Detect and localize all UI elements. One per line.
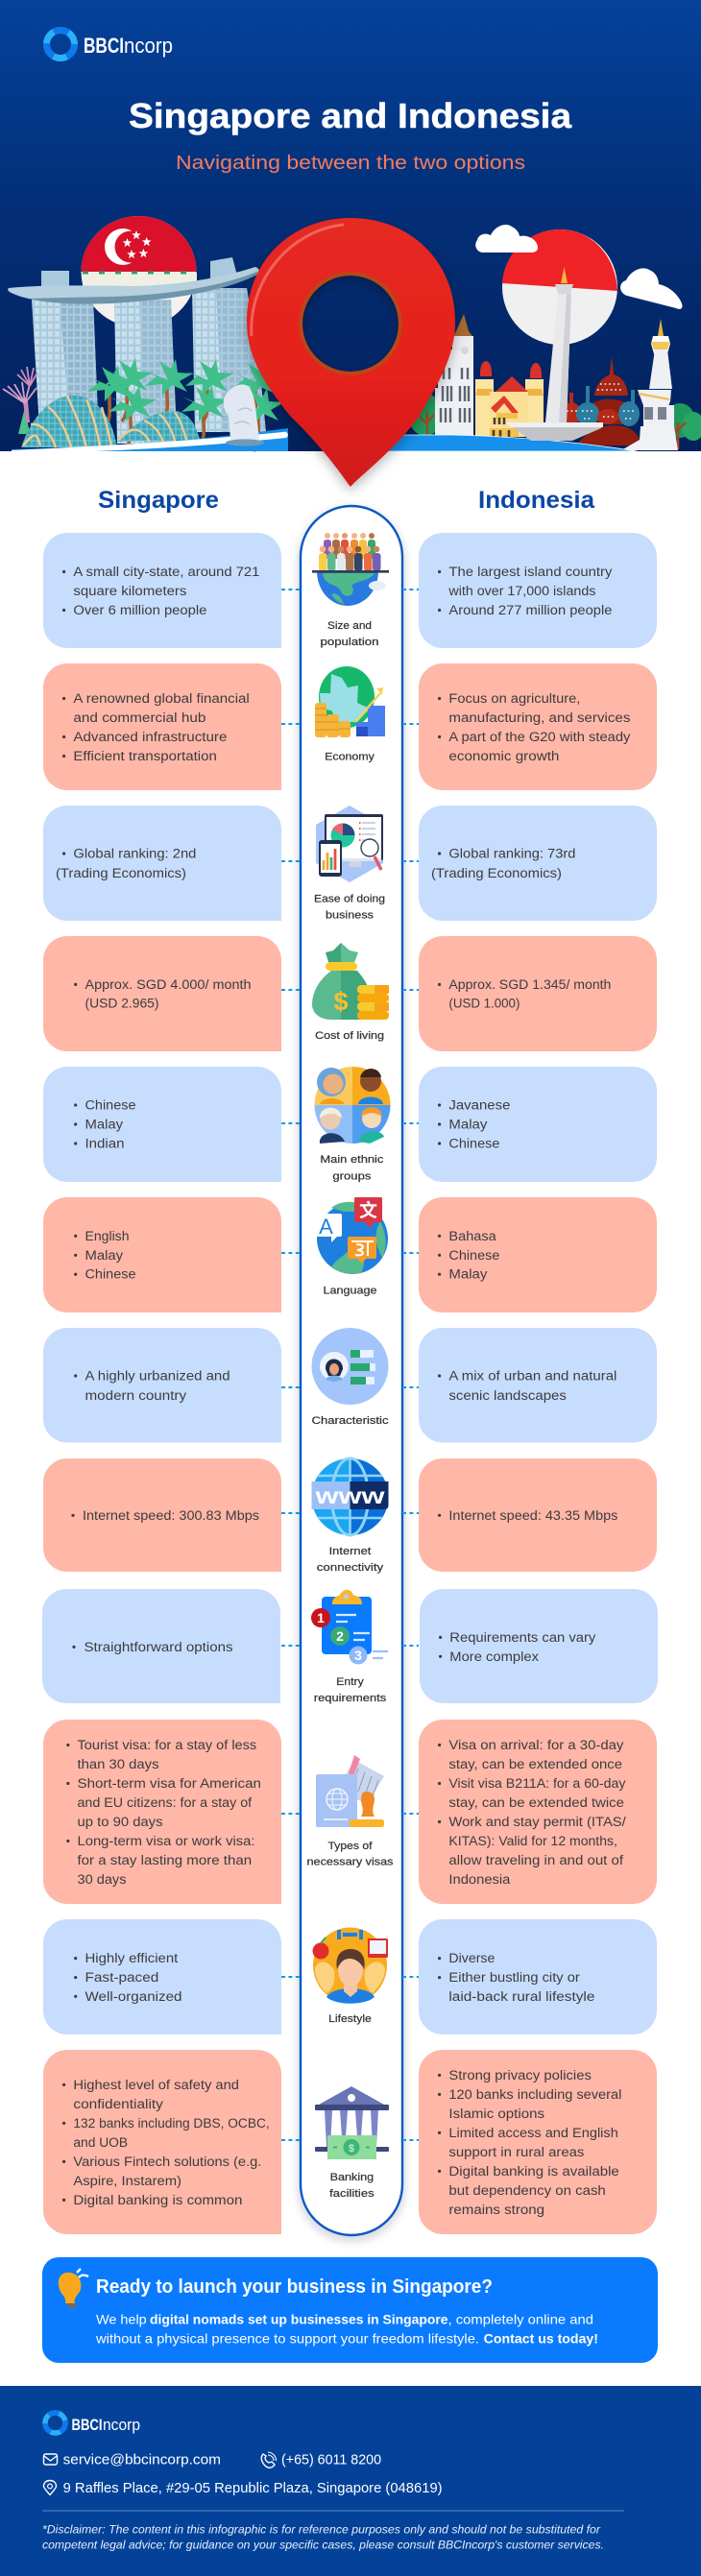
panel: Indonesia economy: manufacturing, and services [448, 710, 631, 725]
panel: Singapore banking facilities: 132 banks including DBS, OCBC, [73, 2116, 270, 2131]
label: entry requirements: requirements [314, 1693, 387, 1704]
label: size and population: population [321, 637, 378, 648]
gardens domes [21, 396, 200, 447]
panel: Singapore language [43, 1197, 281, 1312]
label: entry requirements: Entry [336, 1676, 364, 1688]
panel: Singapore lifestyle [43, 1919, 281, 2034]
panel: Singapore characteristic: modern country [85, 1388, 186, 1403]
sea stripe [12, 432, 288, 451]
label: characteristic: Characteristic [311, 1415, 389, 1427]
panel: Indonesia types of visas: Indonesia [448, 1872, 511, 1887]
illustration: Singapore skyline [3, 216, 288, 451]
trees [408, 394, 701, 449]
panel: Singapore ease of doing business [43, 806, 281, 921]
panel: Singapore cost of living [43, 936, 281, 1051]
label: types of necessary visas: necessary visas [307, 1857, 394, 1868]
palm trees [87, 358, 284, 451]
icon: main ethnic groups [315, 1067, 390, 1144]
panel: Indonesia banking facilities: 120 banks including several [448, 2087, 621, 2102]
label: banking facilities: facilities [329, 2188, 375, 2200]
panel: Indonesia language: Bahasa [448, 1229, 496, 1243]
contact: email: service@bbcincorp.com [63, 2452, 221, 2468]
panel: Indonesia characteristic: scenic landscapes [448, 1388, 567, 1403]
label: lifestyle: Lifestyle [328, 2013, 372, 2025]
connector lines [281, 590, 419, 2140]
icon: banking facilities [315, 2086, 389, 2159]
icon: light bulb [59, 2269, 88, 2308]
icon: size and population [312, 533, 389, 606]
panel: Singapore lifestyle: Fast-paced [85, 1970, 158, 1985]
label: banking facilities: Banking [330, 2172, 374, 2183]
panel: Indonesia ethnic groups: Chinese [448, 1137, 499, 1150]
heading: Indonesia: Indonesia [478, 487, 595, 514]
panel: Indonesia language: Chinese [448, 1248, 499, 1263]
callout text: without a physical presence to support your freedom lifestyle. [95, 2331, 479, 2347]
label: main ethnic groups: groups [332, 1171, 372, 1183]
Marina Bay Sands towers [32, 288, 266, 444]
icon: lifestyle [313, 1928, 388, 2004]
panel: Singapore types of visas: Short-term visa for American [77, 1776, 261, 1791]
label: main ethnic groups [320, 1154, 384, 1183]
panel: Singapore lifestyle: Highly efficient [85, 1951, 179, 1965]
National Monument [506, 267, 603, 441]
panel: Singapore economy: Advanced infrastructure [73, 730, 227, 744]
merlion statue [224, 385, 264, 446]
panel: Indonesia types of visas [419, 1720, 657, 1904]
panel: Singapore size and population: A small city-state, around 721 [73, 565, 259, 579]
panel: Indonesia economy [419, 663, 657, 790]
stupas [562, 357, 641, 445]
icon: cost of living [312, 943, 389, 1020]
panel: Indonesia entry requirements: Requirements can vary [449, 1630, 596, 1645]
panel: Singapore size and population [43, 533, 281, 648]
panel: Indonesia types of visas: allow traveling in and out of [448, 1853, 623, 1867]
panel: Indonesia lifestyle [419, 1919, 657, 2034]
contact: address: 9 Raffles Place, #29-05 Republic Plaza, Singapore (048619) [63, 2481, 443, 2496]
panel: Singapore ethnic groups: Indian [85, 1137, 125, 1150]
icon: language: A [319, 1215, 333, 1239]
panel: Singapore size and population: Over 6 million people [73, 603, 206, 617]
label: language: Language [323, 1285, 376, 1296]
panel: Singapore ease of doing business: (Trading Economics) [56, 866, 186, 880]
logo: BBCIncorp header [46, 31, 173, 58]
panel: Singapore internet connectivity [43, 1458, 281, 1572]
panel: Indonesia entry requirements: More complex [449, 1649, 539, 1664]
disclaimer: competent legal advice; for guidance on your specific cases, please consult BBCIncorp's customer services. [42, 2539, 604, 2552]
icon: ease of doing business [316, 806, 383, 882]
panel: Indonesia ease of doing business: (Trading Economics) [431, 866, 562, 880]
callout text: , completely online and [447, 2312, 593, 2327]
panel: Indonesia types of visas: Work and stay permit (ITAS/ [448, 1815, 626, 1829]
panel: Indonesia banking facilities: remains strong [448, 2203, 544, 2217]
callout text: Contact us today! [484, 2331, 598, 2347]
panel: Singapore types of visas: and EU citizens: for a stay of [77, 1795, 252, 1810]
panel: Singapore ethnic groups [43, 1067, 281, 1182]
panel: Singapore banking facilities: Aspire, Instarem) [73, 2174, 181, 2188]
panel: Singapore cost of living: (USD 2.965) [85, 997, 159, 1010]
panel: Indonesia types of visas: KITAS): Valid for 12 months, [448, 1834, 617, 1848]
label: economy: Economy [325, 751, 375, 762]
panel: Singapore entry requirements [42, 1589, 280, 1703]
panel: Indonesia size and population: The largest island country [448, 565, 613, 579]
panel: Indonesia economy: A part of the G20 with steady [448, 730, 631, 744]
panel: Singapore size and population: square kilometers [73, 584, 187, 598]
panel: Indonesia types of visas: stay, can be extended once [448, 1757, 622, 1771]
panel: Indonesia banking facilities: support in rural areas [448, 2145, 585, 2159]
panel: Indonesia entry requirements [420, 1589, 658, 1703]
label: ease of doing business: business [326, 910, 375, 922]
label: internet connectivity: connectivity [317, 1562, 384, 1574]
callout text: We help [96, 2312, 147, 2327]
red and yellow church [475, 361, 544, 437]
label: ease of doing business: Ease of doing [314, 893, 385, 904]
panel: Singapore economy: Efficient transportation [73, 749, 217, 763]
icon: entry requirements: 1 [317, 1610, 325, 1625]
panel: Singapore characteristic: A highly urbanized and [85, 1369, 230, 1383]
panel: Singapore language: Chinese [85, 1267, 136, 1282]
label: banking facilities [329, 2172, 375, 2200]
icon: banking facilities: $ [349, 2143, 354, 2155]
icon: internet connectivity: www [314, 1483, 385, 1508]
callout heading: Ready to launch your business in Singapore? [96, 2276, 493, 2298]
callout text: digital nomads set up businesses in Singapore [150, 2312, 448, 2327]
panel: Indonesia lifestyle: laid-back rural lifestyle [448, 1989, 594, 2004]
panel: Indonesia language [419, 1197, 657, 1312]
panel: Indonesia size and population: Around 277 million people [448, 603, 612, 617]
panel: Singapore ethnic groups: Chinese [85, 1098, 136, 1112]
label: cost of living: Cost of living [315, 1030, 384, 1042]
panel: Indonesia characteristic: A mix of urban and natural [448, 1369, 616, 1383]
panel: Singapore banking facilities: confidentiality [73, 2097, 163, 2111]
subtitle: Navigating between the two options [176, 153, 525, 174]
icon: language: 文 [359, 1196, 377, 1222]
icon: entry requirements: 2 [336, 1628, 344, 1644]
panel: Indonesia internet connectivity [419, 1458, 657, 1572]
panel: Indonesia banking facilities [419, 2050, 657, 2234]
panel: Indonesia types of visas: stay, can be extended twice [448, 1795, 624, 1810]
icon: language [311, 1196, 388, 1274]
panel: Singapore banking facilities [43, 2050, 281, 2234]
panel: Indonesia ethnic groups: Malay [448, 1118, 488, 1131]
logo: BBCIncorp footer [45, 2413, 140, 2434]
panel: Singapore types of visas: than 30 days [77, 1757, 159, 1771]
panel: Singapore types of visas: 30 days [77, 1872, 127, 1887]
panel: Singapore banking facilities: Highest level of safety and [73, 2078, 239, 2092]
callout: call to action [42, 2257, 658, 2363]
panel: Indonesia ethnic groups [419, 1067, 657, 1182]
logo: BBCIncorp header: ncorp [124, 34, 173, 58]
icon: entry requirements: 3 [354, 1648, 362, 1663]
panel: Indonesia banking facilities: but dependency on cash [448, 2183, 606, 2198]
panel: Indonesia ease of doing business [419, 806, 657, 921]
central category column [301, 506, 402, 2235]
label: entry requirements [314, 1676, 387, 1704]
SkyPark deck [8, 257, 259, 303]
panel: Indonesia internet connectivity: Internet speed: 43.35 Mbps [448, 1508, 618, 1523]
panel: Singapore banking facilities: Digital banking is common [73, 2193, 242, 2207]
callout text [95, 2312, 598, 2347]
panel: Indonesia cost of living: Approx. SGD 1.345/ month [448, 977, 611, 992]
disclaimer: *Disclaimer: The content in this infographic is for reference purposes only and should not be substituted for [42, 2523, 601, 2537]
panel: Singapore economy [43, 663, 281, 790]
supertrees [3, 367, 37, 434]
icon: internet connectivity [311, 1458, 388, 1535]
panel: Indonesia economy: Focus on agriculture, [448, 691, 580, 706]
icon: Indonesia flag [502, 229, 617, 345]
panel: Indonesia characteristic [419, 1328, 657, 1442]
sea right [384, 435, 637, 451]
label: internet connectivity: Internet [329, 1546, 371, 1557]
label: types of necessary visas: Types of [328, 1841, 374, 1852]
panel: Singapore banking facilities: Various Fintech solutions (e.g. [73, 2155, 261, 2169]
panel: Singapore language: English [85, 1229, 129, 1243]
clouds [475, 225, 683, 309]
heading: Singapore: Singapore [98, 487, 219, 514]
panel: Indonesia size and population [419, 533, 657, 648]
panel: Indonesia ethnic groups: Javanese [448, 1098, 510, 1112]
label: ease of doing business [314, 893, 385, 922]
panel: Singapore economy: A renowned global financial [73, 691, 250, 706]
logo: BBCIncorp header: BBCI [84, 34, 124, 58]
Tugu monument [621, 319, 678, 450]
panel: Indonesia cost of living: (USD 1.000) [448, 997, 520, 1010]
clock tower [435, 314, 473, 436]
disclaimer [42, 2523, 604, 2552]
icon: types of necessary visas [316, 1755, 384, 1827]
panel: Singapore types of visas [43, 1720, 281, 1904]
panel: Singapore internet connectivity: Internet speed: 300.83 Mbps [83, 1508, 259, 1523]
title: Singapore and Indonesia [129, 96, 572, 135]
panel: Singapore types of visas: up to 90 days [77, 1815, 163, 1829]
icon: Singapore flag [81, 216, 196, 327]
illustration: Indonesia skyline [384, 225, 701, 451]
panel: Singapore ethnic groups: Malay [85, 1118, 123, 1131]
panel: Indonesia banking facilities: Islamic options [448, 2107, 544, 2121]
panel: Indonesia lifestyle: Either bustling city or [448, 1970, 580, 1985]
panel: Singapore ease of doing business: Global ranking: 2nd [73, 847, 196, 860]
panel: Singapore banking facilities: and UOB [73, 2135, 128, 2150]
panel: Indonesia banking facilities: Digital banking is available [448, 2164, 619, 2179]
panel: Indonesia banking facilities: Strong privacy policies [448, 2068, 592, 2082]
panel: Indonesia banking facilities: Limited access and English [448, 2126, 618, 2140]
icon: entry requirements [311, 1590, 388, 1665]
footer background [0, 2386, 701, 2576]
panel: Singapore types of visas: Tourist visa: for a stay of less [77, 1738, 257, 1752]
label: main ethnic groups: Main ethnic [320, 1154, 384, 1166]
sea left [12, 428, 288, 451]
panel: Singapore lifestyle: Well-organized [85, 1989, 182, 2004]
icon: characteristic [311, 1328, 388, 1405]
panel: Indonesia types of visas: Visit visa B211A: for a 60-day [448, 1776, 626, 1791]
logo: BBCIncorp footer: ncorp [103, 2416, 140, 2434]
panel: Indonesia ease of doing business: Global ranking: 73rd [448, 847, 575, 860]
panel: Singapore characteristic [43, 1328, 281, 1442]
icon: cost of living: $ [333, 987, 349, 1016]
icon: location pin [247, 218, 455, 487]
panel: Singapore entry requirements: Straightforward options [85, 1640, 233, 1654]
label: types of necessary visas [307, 1841, 394, 1868]
panel: Singapore cost of living: Approx. SGD 4.000/ month [85, 977, 252, 992]
label: internet connectivity [317, 1546, 384, 1574]
panel: Indonesia types of visas: Visa on arrival: for a 30-day [448, 1738, 624, 1752]
panel: Indonesia language: Malay [448, 1267, 488, 1282]
label: size and population: Size and [327, 620, 372, 632]
panel: Indonesia size and population: with over 17,000 islands [447, 584, 596, 598]
icon: economy [315, 666, 385, 737]
panel: Singapore types of visas: Long-term visa or work visa: [77, 1834, 255, 1848]
hero background [0, 0, 701, 451]
contact: phone: (+65) 6011 8200 [281, 2452, 381, 2468]
panel: Indonesia cost of living [419, 936, 657, 1051]
label: size and population [321, 620, 378, 648]
panel: Singapore economy: and commercial hub [73, 710, 205, 725]
panel: Indonesia lifestyle: Diverse [448, 1951, 495, 1965]
panel: Singapore types of visas: for a stay lasting more than [77, 1853, 252, 1867]
panel: Indonesia economy: economic growth [448, 749, 559, 763]
logo: BBCIncorp footer: BBCI [71, 2416, 102, 2434]
panel: Singapore language: Malay [85, 1248, 123, 1263]
